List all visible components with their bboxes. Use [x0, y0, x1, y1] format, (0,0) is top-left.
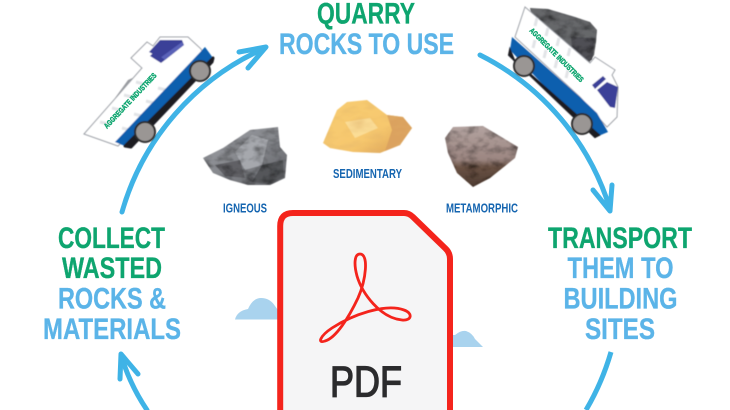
truck body — [515, 7, 618, 127]
truck blue stripe — [115, 47, 213, 146]
heading: quarry rocks to use: ROCKS TO USE — [279, 28, 454, 61]
pdf label: PDF — [330, 358, 402, 406]
heading: transport them to building sites: TRANSPORT — [548, 222, 692, 255]
acrobat logo — [321, 254, 410, 342]
arrow: collect to quarry — [122, 47, 266, 212]
rock load — [530, 8, 597, 65]
truck wheels — [135, 61, 210, 142]
cloud: left — [235, 298, 285, 320]
arrow: bottom left, rising to collect — [120, 354, 147, 410]
truck box vents — [533, 18, 570, 78]
truck tarp bumps — [100, 76, 137, 118]
pdf document icon — [280, 213, 450, 410]
truck body — [84, 37, 205, 146]
heading: collect wasted rocks and materials — [43, 222, 181, 346]
truck lettering: AGGREGATE INDUSTRIES — [102, 71, 159, 130]
truck wheels — [514, 56, 592, 134]
truck windscreen — [597, 82, 618, 108]
document sheet — [280, 213, 450, 410]
heading: quarry rocks to use — [279, 0, 454, 61]
cloud: right — [445, 331, 483, 347]
arrow: bottom right, leaving transport — [586, 352, 611, 410]
label: igneous: IGNEOUS — [223, 202, 267, 216]
heading: collect wasted rocks and materials: COLLECT — [58, 222, 165, 255]
heading: transport them to building sites: BUILDING — [564, 282, 678, 316]
heading: transport them to building sites: THEM TO — [568, 252, 674, 285]
rock: sedimentary — [323, 100, 412, 153]
truck blue stripe — [510, 37, 608, 137]
label: metamorphic: METAMORPHIC — [446, 202, 518, 216]
heading: collect wasted rocks and materials: ROCKS & — [58, 282, 166, 316]
truck: descending with rock load, right — [509, 7, 618, 137]
rock: metamorphic — [445, 126, 518, 187]
heading: transport them to building sites — [548, 222, 692, 346]
heading: collect wasted rocks and materials: WASTED — [62, 252, 162, 285]
heading: collect wasted rocks and materials: MATERIALS — [43, 313, 181, 346]
heading: transport them to building sites: SITES — [585, 313, 655, 346]
truck windscreen — [149, 40, 184, 60]
label: sedimentary: SEDIMENTARY — [333, 167, 403, 181]
arrow: quarry to transport — [480, 55, 612, 211]
rock: igneous — [203, 127, 287, 185]
truck box vents — [100, 82, 166, 130]
truck lettering: AGGREGATE INDUSTRIES — [528, 26, 586, 84]
truck: climbing, left — [84, 37, 213, 147]
